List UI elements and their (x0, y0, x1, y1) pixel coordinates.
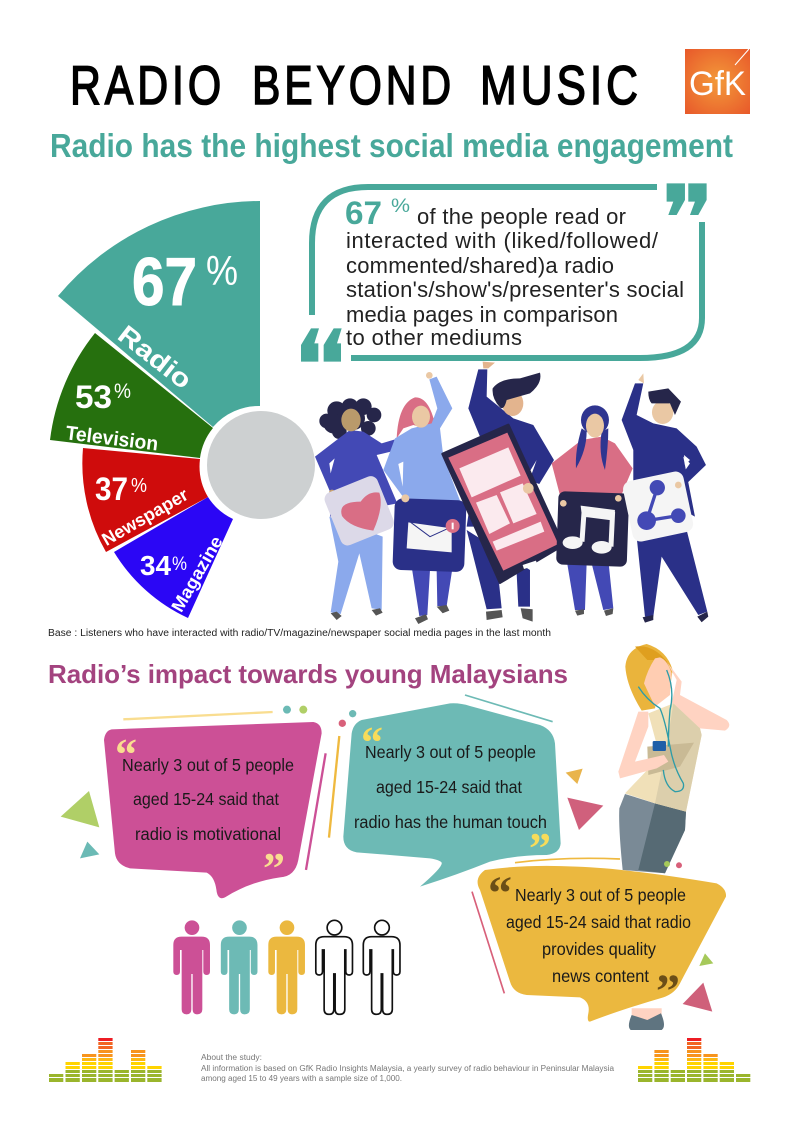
wedge: radio 67%: Radio (112, 319, 198, 395)
icon: closing quote: ” (656, 965, 680, 1018)
about the study: among aged 15 to 49 years with a sample size of 1,000. (201, 1074, 402, 1083)
heading: impact towards young Malaysians: Radio’s impact towards young Malaysians (48, 659, 568, 689)
person: pink hair, mail card (383, 372, 467, 624)
bubble text: radio is motivational (135, 824, 281, 844)
centre circle (207, 411, 315, 519)
bubble text: Nearly 3 out of 5 people (122, 755, 294, 775)
wedge: television 53% (50, 333, 213, 458)
logo: GfK (685, 49, 750, 114)
callout border (312, 187, 702, 358)
person icon: filled pink (173, 920, 210, 1014)
bubble shape (104, 722, 322, 898)
icon: closing quote (667, 183, 707, 215)
bubble text (122, 755, 294, 844)
icon: opening quote: “ (488, 867, 512, 920)
callout: 67% statement (301, 183, 707, 362)
base note: Base : Listeners who have interacted with radio/TV/magazine/newspaper social media pages in the last month (48, 628, 551, 639)
bubble text: provides quality (542, 939, 656, 959)
bubble text: aged 15-24 said that radio (506, 912, 691, 932)
person icon: outline (363, 920, 400, 1014)
bubble shape (478, 866, 726, 1022)
illustration: five people holding social media icons (315, 362, 708, 624)
wedge: newspaper 37% (82, 448, 208, 552)
wedge: radio 67%: % (206, 247, 238, 294)
icon: opening quote: “ (115, 730, 137, 779)
callout text: media pages in comparison (346, 302, 618, 327)
bubble text: aged 15-24 said that (376, 777, 522, 797)
callout text: commented/shared)a radio (346, 253, 614, 278)
bubble: motivational (104, 722, 322, 898)
bubble text (506, 885, 691, 986)
bubble text: Nearly 3 out of 5 people (365, 742, 536, 762)
person: afro hair, heart card (315, 398, 397, 620)
person: braids, music card (552, 405, 633, 616)
bubble text (354, 742, 547, 832)
wedge: magazine 34%: Magazine (167, 533, 227, 615)
wedge: television 53%: % (114, 380, 131, 403)
title: BEYOND (252, 54, 455, 116)
callout text: station's/show's/presenter's social (346, 277, 684, 302)
equalizer: left (49, 1038, 162, 1082)
icon: closing quote: ” (263, 844, 285, 893)
bubble: quality news content (478, 866, 726, 1022)
bubble text: news content (552, 966, 649, 986)
wedge: radio 67%: 67 (132, 244, 197, 320)
equalizer: right (638, 1038, 751, 1082)
person icon: filled yellow (268, 920, 305, 1014)
bubble text: aged 15-24 said that (133, 789, 279, 809)
about the study: About the study: (201, 1053, 262, 1062)
wedge: magazine 34%: % (172, 554, 187, 575)
person: short hair, share card (622, 373, 708, 623)
bubble: human touch (343, 703, 561, 887)
callout text: % (391, 196, 410, 217)
about the study: All information is based on GfK Radio Insights Malaysia, a yearly survey of radio behaviour in Peninsular Malaysia (201, 1064, 615, 1073)
logo: GfK: GfK (689, 65, 746, 103)
icon: closing quote: ” (529, 824, 551, 873)
wedge: newspaper 37%: 37 (95, 471, 128, 507)
callout text: of the people read or (417, 204, 626, 229)
callout text: to other mediums (346, 325, 522, 350)
heading: social media engagement: Radio has the highest social media engagement (50, 127, 733, 164)
bubble text: Nearly 3 out of 5 people (515, 885, 686, 905)
wedge: magazine 34%: 34 (140, 550, 171, 581)
callout text: 67 (345, 195, 382, 231)
title (70, 54, 642, 116)
icon: opening quote: “ (361, 718, 383, 767)
title: MUSIC (480, 54, 642, 116)
bubble shape (343, 703, 561, 887)
wedge: magazine 34% (114, 497, 233, 618)
person: raised arm, phone (443, 362, 563, 622)
wedge: newspaper 37%: Newspaper (98, 484, 192, 550)
person icon: filled teal (221, 920, 257, 1014)
callout text (345, 195, 684, 350)
bubble text: radio has the human touch (354, 812, 547, 832)
person icon: outline (316, 920, 352, 1014)
about the study (201, 1053, 615, 1083)
wedge: newspaper 37%: % (131, 475, 147, 497)
wedge: radio 67% (58, 201, 260, 427)
title: RADIO (70, 54, 225, 116)
wedge: television 53%: 53 (75, 379, 112, 415)
callout text: interacted with (liked/followed/ (346, 228, 659, 253)
chart: social media engagement by medium (50, 201, 315, 618)
icon: opening quote (301, 328, 342, 362)
pictogram: 3 out of 5 people (173, 920, 400, 1014)
wedge: television 53%: Television (64, 422, 159, 456)
illustration: woman listening with earphones (618, 644, 729, 1030)
decorative triangles, dots and lines around bubbles (61, 695, 713, 1012)
